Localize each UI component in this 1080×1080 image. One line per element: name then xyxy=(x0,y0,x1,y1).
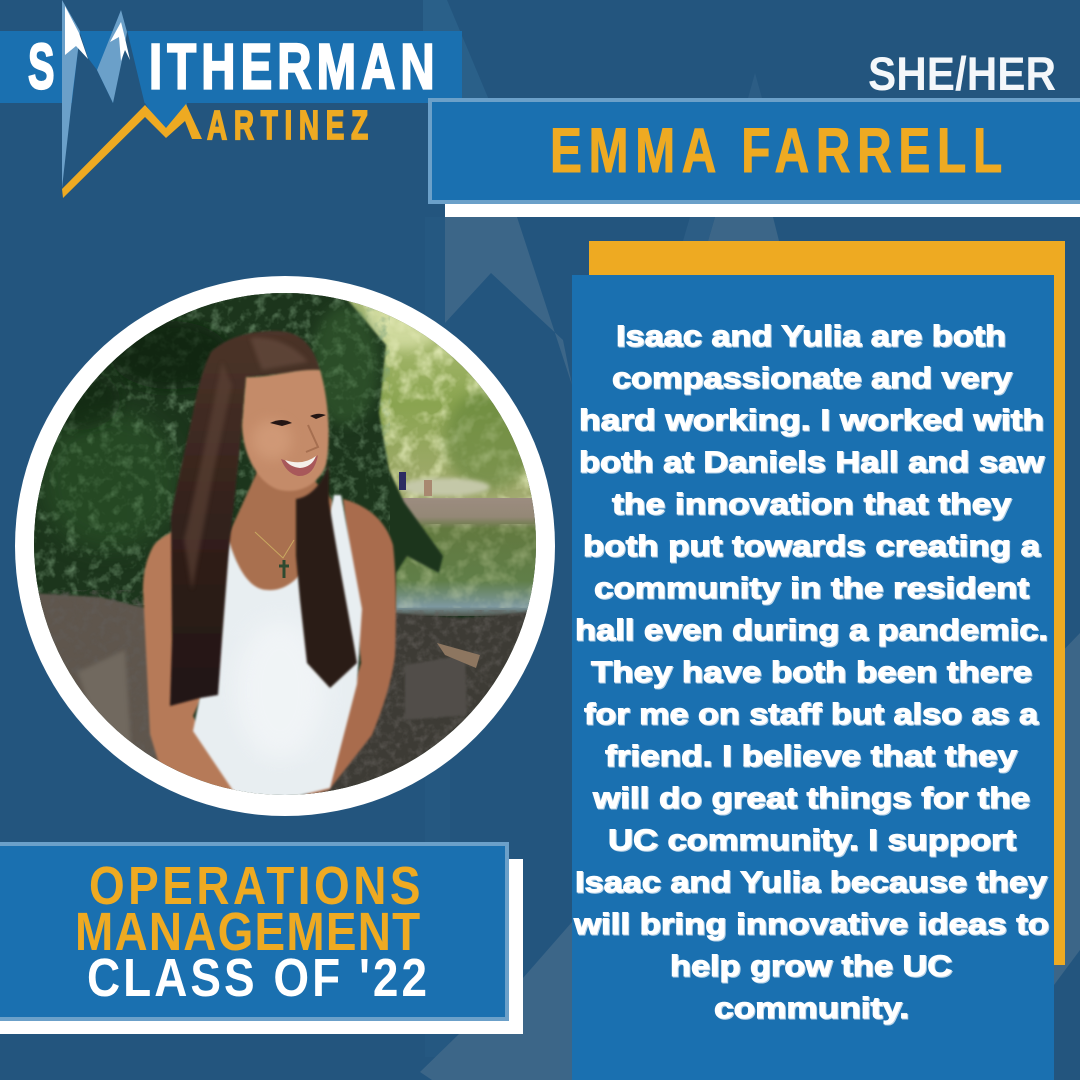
name banner xyxy=(430,100,1080,217)
testimonial text: UC community. I support xyxy=(608,824,1016,857)
photo: hair xyxy=(170,331,320,706)
logo mountain xyxy=(62,0,145,188)
testimonial panel xyxy=(572,275,1054,1080)
testimonial text: the innovation that they xyxy=(612,488,1011,521)
testimonial text: will bring innovative ideas to xyxy=(573,908,1049,941)
logo wordmark bottom: ARTINEZ xyxy=(207,103,368,148)
logo: Smitherman Martinez xyxy=(0,0,462,198)
testimonial text: both put towards creating a xyxy=(583,530,1040,563)
logo yellow peak line xyxy=(62,104,202,198)
testimonial text: hall even during a pandemic. xyxy=(575,614,1048,647)
logo wordmark top: S xyxy=(28,32,54,103)
testimonial text: help grow the UC xyxy=(670,950,952,983)
photo: arms xyxy=(143,525,236,800)
major: MANAGEMENT xyxy=(75,902,420,962)
class year: CLASS OF '22 xyxy=(87,948,427,1008)
major xyxy=(75,856,420,962)
major: OPERATIONS xyxy=(89,856,421,916)
yellow accent panel xyxy=(589,241,1065,965)
photo: eyes and smile xyxy=(270,420,292,426)
testimonial text: both at Daniels Hall and saw xyxy=(579,446,1045,479)
logo wordmark top xyxy=(28,31,435,103)
logo wordmark top: ITHERMAN xyxy=(149,31,435,102)
testimonial text: community in the resident xyxy=(594,572,1029,605)
testimonial text: Isaac and Yulia are both xyxy=(616,320,1006,353)
photo: bright trees xyxy=(340,299,532,502)
testimonial text: hard working. I worked with xyxy=(579,404,1044,437)
testimonial text: for me on staff but also as a xyxy=(584,698,1038,731)
logo band xyxy=(0,31,462,103)
testimonial text: community. xyxy=(714,992,909,1025)
testimonial text: friend. I believe that they xyxy=(605,740,1017,773)
photo: figures in distance xyxy=(399,472,406,490)
photo: stone wall xyxy=(38,592,184,774)
testimonial text: will do great things for the xyxy=(592,782,1030,815)
testimonial text: compassionate and very xyxy=(612,362,1012,395)
logo notch xyxy=(145,103,187,137)
photo: necklace xyxy=(255,532,294,558)
major and class banner xyxy=(0,844,523,1034)
photo xyxy=(30,285,540,800)
photo: white top xyxy=(193,495,362,798)
photo: dark foliage xyxy=(30,285,443,610)
photo: hair right strand xyxy=(296,463,357,688)
photo: neck and chest xyxy=(228,471,333,592)
photo portrait in white ring xyxy=(15,276,555,816)
photo: river xyxy=(385,498,540,616)
testimonial text: Isaac and Yulia because they xyxy=(575,866,1047,899)
testimonial text xyxy=(573,320,1049,1025)
photo: face xyxy=(242,370,329,491)
testimonial text: They have both been there xyxy=(591,656,1032,689)
white ring xyxy=(15,276,555,816)
name: EMMA FARRELL xyxy=(550,115,1002,186)
pronouns: SHE/HER xyxy=(868,47,1056,100)
